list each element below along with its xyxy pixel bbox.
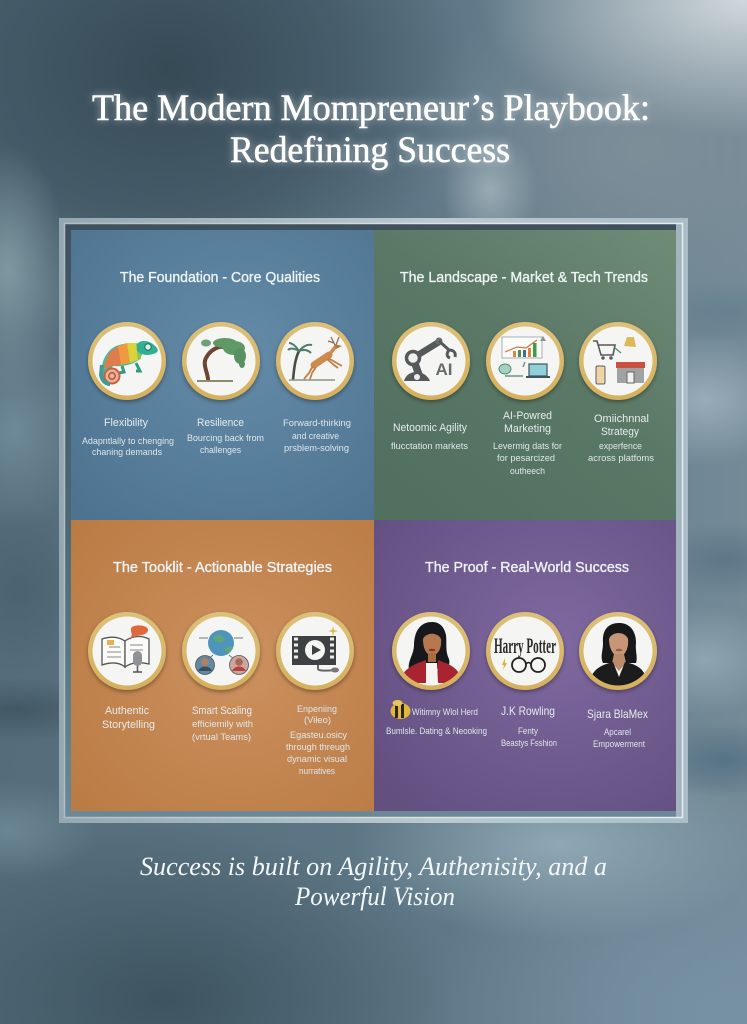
panel: the proof — [374, 520, 676, 811]
icon: bent tree — [182, 322, 260, 400]
item: video: dynamic visual — [287, 754, 347, 765]
title — [92, 88, 650, 171]
item: flexibility — [82, 417, 174, 458]
item: video: nurratives — [299, 766, 335, 777]
item: video: Enpeniing — [297, 704, 337, 715]
title: The Modern Mompreneur’s Playbook: — [92, 88, 650, 129]
item: forward thinking: Forward-thirking — [283, 418, 351, 429]
heading: proof: The Proof - Real-World Success — [425, 560, 629, 576]
item: resilience: Bourcing back from — [187, 433, 264, 444]
heading: toolkit: The Tooklit - Actionable Strategies — [113, 560, 332, 576]
item: storytelling: Authentic — [105, 705, 149, 717]
item: smart scaling — [192, 705, 253, 743]
panel: the foundation — [71, 230, 374, 520]
icon: robot arm AI: AI — [436, 360, 452, 379]
item: forward thinking: prsblem-solving — [284, 443, 349, 454]
item: forward thinking: and creative — [292, 431, 339, 442]
item: resilience: challenges — [200, 445, 241, 456]
item: flexibility: Flexibility — [104, 417, 148, 429]
panel: the toolkit — [71, 520, 374, 811]
item: jk rowling: Fenty — [518, 726, 538, 736]
item: smart scaling: Smart Scaling — [192, 705, 252, 717]
item: resilience: Resilience — [197, 417, 244, 429]
heading: landscape: The Landscape - Market & Tech Trends — [400, 270, 648, 286]
item: smart scaling: efficiemily with — [192, 719, 253, 730]
item: video: (Viłeo) — [304, 715, 331, 726]
item: omnichannel: Strategy — [601, 426, 639, 438]
icon: bee logo — [390, 700, 410, 719]
closing tagline — [140, 852, 607, 911]
item: whitney wolfe herd: Bumlsle. Dating & Neooking — [386, 726, 487, 736]
heading: foundation: The Foundation - Core Qualities — [120, 270, 320, 286]
icon: tree and gazelle — [276, 322, 354, 400]
item: sara blakely: Sjara BlaMex — [587, 707, 648, 721]
item: video — [286, 704, 350, 777]
item: flexibility: chaning demands — [92, 447, 162, 458]
title: Redefining Success — [230, 130, 510, 171]
icon: omnichannel store — [579, 322, 657, 400]
item: video: Egasteu.osicy — [290, 730, 347, 741]
icon: robot arm AI — [392, 322, 470, 400]
item: smart scaling: (vrtual Teams) — [192, 732, 251, 743]
item: omnichannel: across platfoms — [588, 453, 654, 464]
item: storytelling — [102, 705, 155, 731]
item: ai marketing: AI-Powred — [503, 410, 552, 422]
icon: video film — [276, 612, 354, 690]
icon: harry potter logo: Harry Potter — [494, 633, 556, 658]
item: sara blakely: Empowerment — [593, 739, 645, 749]
item: economic agility — [391, 422, 468, 452]
item: storytelling: Storytelling — [102, 719, 155, 731]
item: omnichannel — [588, 413, 654, 464]
item: forward thinking — [283, 418, 351, 454]
item: sara blakely — [587, 707, 648, 749]
item: ai marketing: Marketing — [504, 423, 551, 435]
closing tagline: Success is built on Agility, Authenisity, and a — [140, 852, 607, 881]
item: economic agility: Netoomic Agility — [393, 422, 467, 434]
icon: globe and team — [182, 612, 260, 690]
item: omnichannel: Omiichnnal — [594, 413, 649, 425]
item: whitney wolfe herd: Witimny Wlol Herd — [412, 707, 478, 717]
icon: book and microphone — [88, 612, 166, 690]
title: The Modern Mompreneur’s Playbook: — [92, 88, 650, 129]
item: ai marketing: for pesarcized — [497, 453, 555, 464]
item: ai marketing: Levermig dats for — [493, 441, 562, 452]
item: jk rowling: J.K Rowling — [501, 704, 555, 718]
item: ai marketing: outheech — [510, 466, 545, 477]
item: omnichannel: experfence — [599, 441, 642, 452]
frame — [59, 218, 688, 823]
item: ai marketing — [493, 410, 562, 477]
item: economic agility: flucctation markets — [391, 441, 468, 452]
icon: harry potter logo — [486, 612, 564, 690]
item: whitney wolfe herd — [386, 707, 487, 736]
icon: portrait in red blazer — [392, 612, 470, 690]
item: jk rowling — [501, 704, 557, 748]
icon: chameleon — [88, 322, 166, 400]
item: jk rowling: Beastys Fsshion — [501, 738, 557, 748]
icon: portrait in black blazer — [579, 612, 657, 690]
item: video: through threugh — [286, 742, 350, 753]
item: resilience — [187, 417, 264, 456]
closing tagline: Powerful Vision — [294, 882, 455, 911]
item: flexibility: Adapntlally to chenging — [82, 436, 174, 447]
item: sara blakely: Apcarel — [604, 727, 631, 737]
panel: the landscape — [374, 230, 676, 520]
title: Redefining Success — [230, 130, 510, 171]
icon: analytics and laptop — [486, 322, 564, 400]
